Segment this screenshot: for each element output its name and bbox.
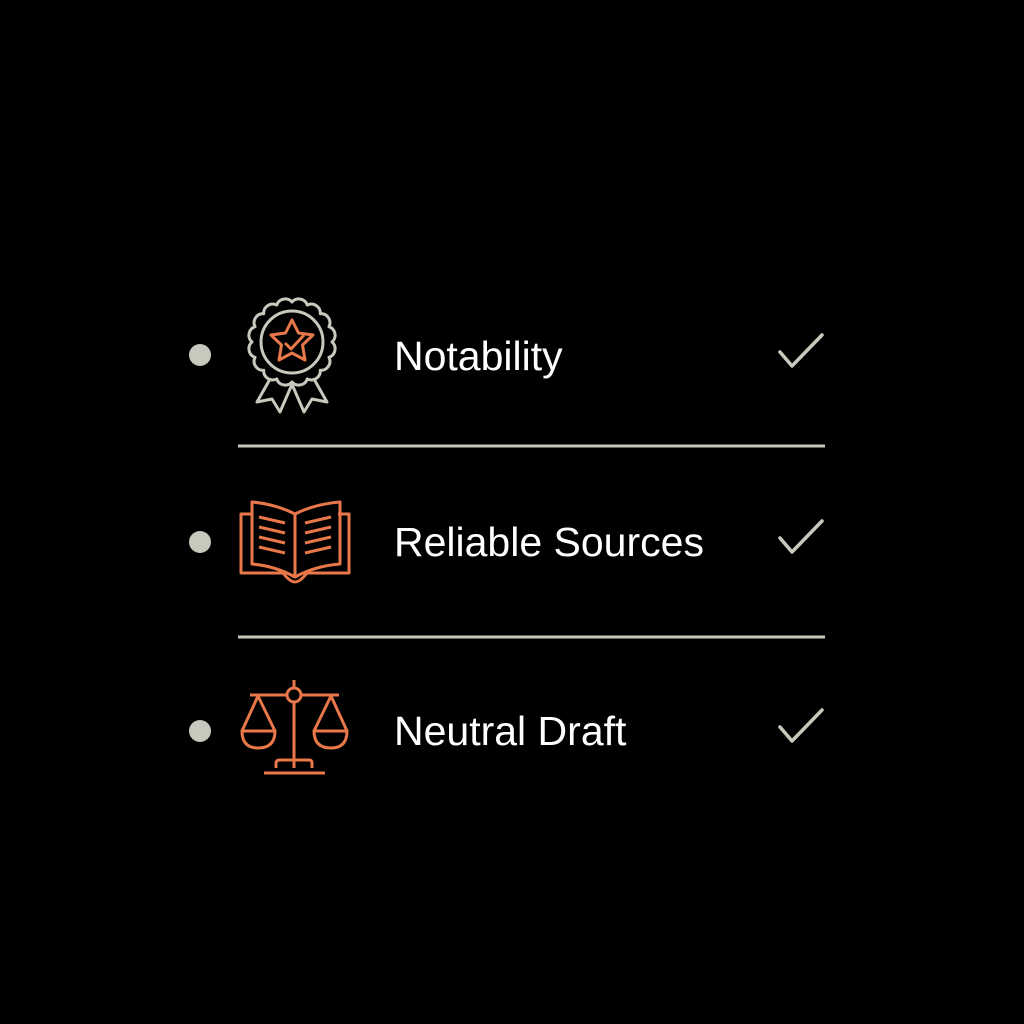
row 2: reliable sources [189,502,349,582]
bullet 2 [189,531,211,553]
icon: award badge [249,299,335,412]
label: Notability: Notability [394,333,563,379]
label: Reliable Sources: Reliable Sources [394,519,704,565]
divider 1 [238,444,825,448]
divider 2 [238,636,825,638]
bullet 1 [189,344,211,366]
check 1 [780,335,822,366]
check marks [780,335,822,741]
row 1: notability [189,299,335,412]
check 3 [780,710,822,741]
icon: scales [242,680,347,773]
label: Neutral Draft: Neutral Draft [394,708,626,754]
check 2 [780,521,822,552]
row 3: neutral draft [189,680,347,773]
icon: open book [241,502,349,582]
bullet 3 [189,720,211,742]
